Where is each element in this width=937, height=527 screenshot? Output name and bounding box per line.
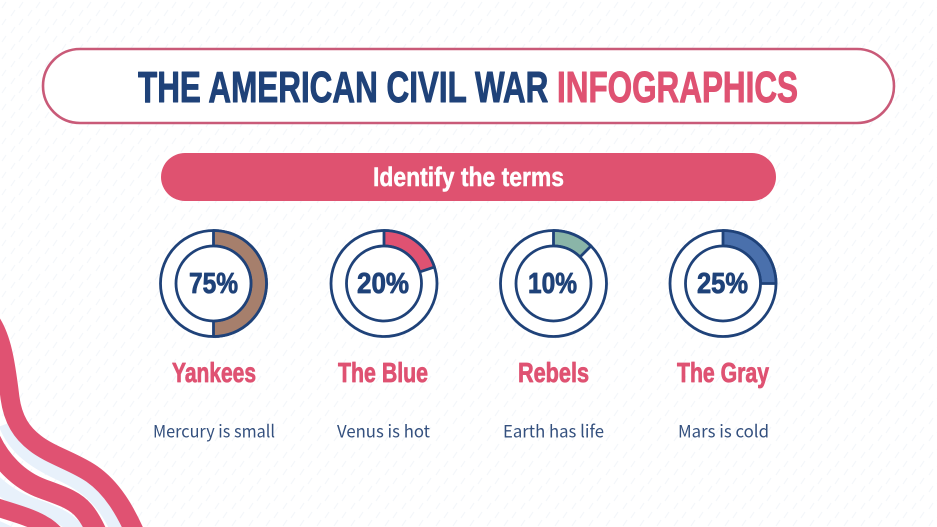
label: The Blue xyxy=(338,357,428,388)
donut chart 10% xyxy=(500,230,606,336)
subtitle text: Identify the terms xyxy=(373,162,564,192)
donut chart 75%: 75% xyxy=(189,268,238,300)
description: Mercury is small xyxy=(153,418,275,442)
donut chart 10%: 10% xyxy=(528,268,577,300)
donut chart 20%: 20% xyxy=(357,268,409,300)
donut chart 25%: 25% xyxy=(697,268,748,300)
title text: THE AMERICAN CIVIL WAR INFOGRAPHICS xyxy=(138,63,798,112)
label: Rebels xyxy=(518,357,589,388)
column: Yankees xyxy=(153,230,275,442)
column: The Gray xyxy=(670,230,776,442)
donut chart 20% xyxy=(331,230,437,336)
donut chart 25% xyxy=(670,230,776,336)
description: Mars is cold xyxy=(678,418,769,442)
label: The Gray xyxy=(677,357,769,388)
column: Rebels xyxy=(500,230,606,442)
donut chart 75% xyxy=(160,230,266,336)
description: Venus is hot xyxy=(337,418,431,442)
column: The Blue xyxy=(331,230,437,442)
decorative waves bottom-left xyxy=(0,318,136,527)
subtitle banner xyxy=(161,153,776,201)
label: Yankees xyxy=(172,357,256,388)
description: Earth has life xyxy=(503,418,604,442)
title pill xyxy=(43,49,894,123)
